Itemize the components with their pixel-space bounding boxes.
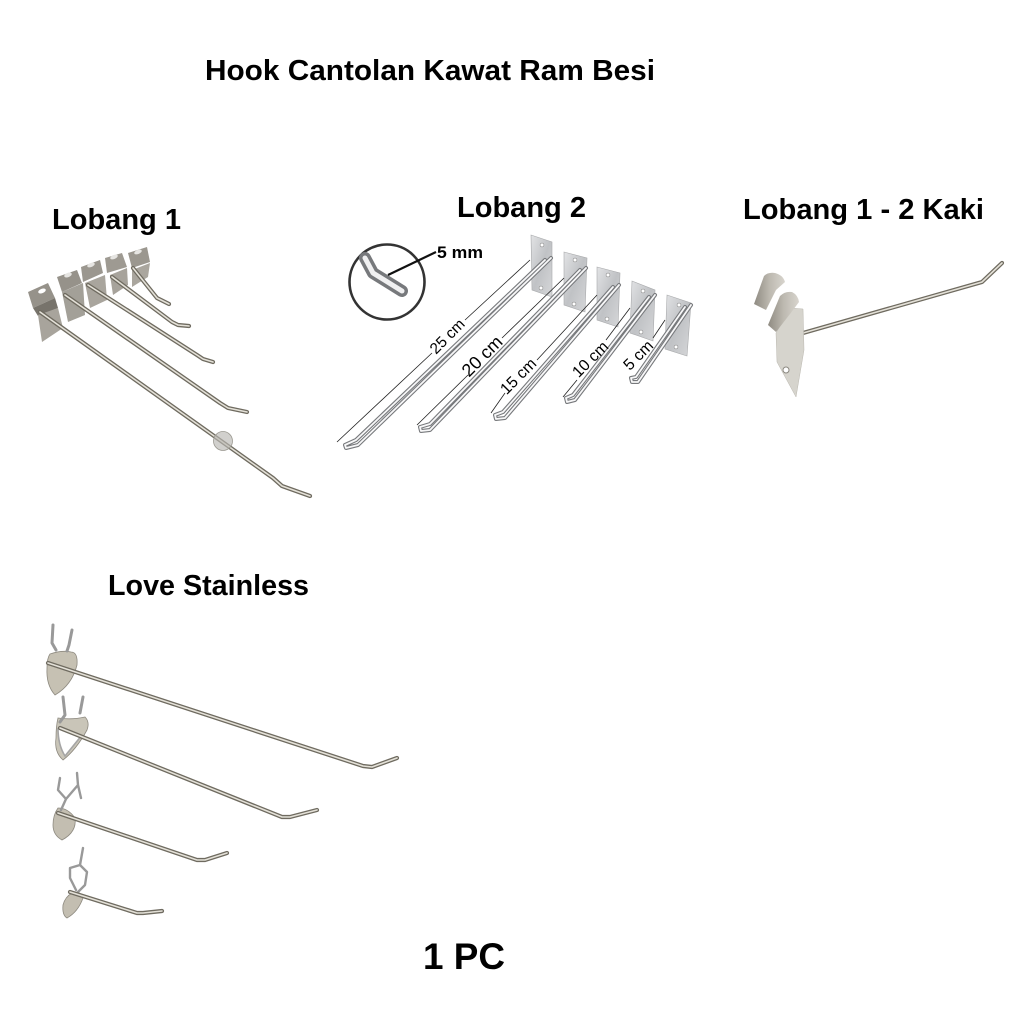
hook 1 [47,625,397,767]
length labels: 25 cm [427,316,469,358]
hook 25 cm [345,258,551,448]
photo: Love Stainless peg hooks [47,625,397,918]
hook 5 cm [133,268,169,304]
title: Hook Cantolan Kawat Ram Besi [205,55,655,87]
hook 3 [53,773,227,860]
quantity label: 1 PC [423,936,505,977]
photo: Lobang 2 chrome hooks with lengths [337,235,691,448]
hook 20 cm [65,295,247,412]
photo: Lobang 1 - 2 Kaki hook [754,263,1002,397]
heading: Lobang 1 - 2 Kaki: Lobang 1 - 2 Kaki [743,194,984,226]
bracket plates [531,235,691,356]
hook 25 cm [40,312,310,496]
callout: 5 mm wire detail [350,243,483,320]
hook 15 cm [495,285,619,419]
length labels: 15 cm [497,355,540,398]
slat brackets [28,247,150,342]
length labels: 20 cm [458,332,507,381]
length labels: 5 cm [621,338,657,374]
hook wire [803,263,1002,333]
heading: Lobang 2: Lobang 2 [457,192,586,224]
photo: Lobang 1 slatwall hooks [28,247,310,496]
hook 10 cm [112,277,189,326]
length labels: 10 cm [569,338,612,381]
back plate [776,308,804,397]
hook 4 [63,848,162,918]
length labels [427,316,657,398]
bracket holes [539,243,681,349]
lens marker [214,432,232,450]
hook 15 cm [88,285,213,362]
hook 20 cm [420,268,586,431]
rear tab [754,273,785,310]
front tab [768,292,799,332]
hook 2 [56,697,317,817]
hook 5 cm [631,305,691,382]
hook 10 cm [566,295,655,402]
heading: Lobang 1: Lobang 1 [52,204,181,236]
dimension lines [337,260,665,442]
heading: Love Stainless: Love Stainless [108,570,309,602]
callout: 5 mm wire detail: 5 mm [437,243,483,262]
